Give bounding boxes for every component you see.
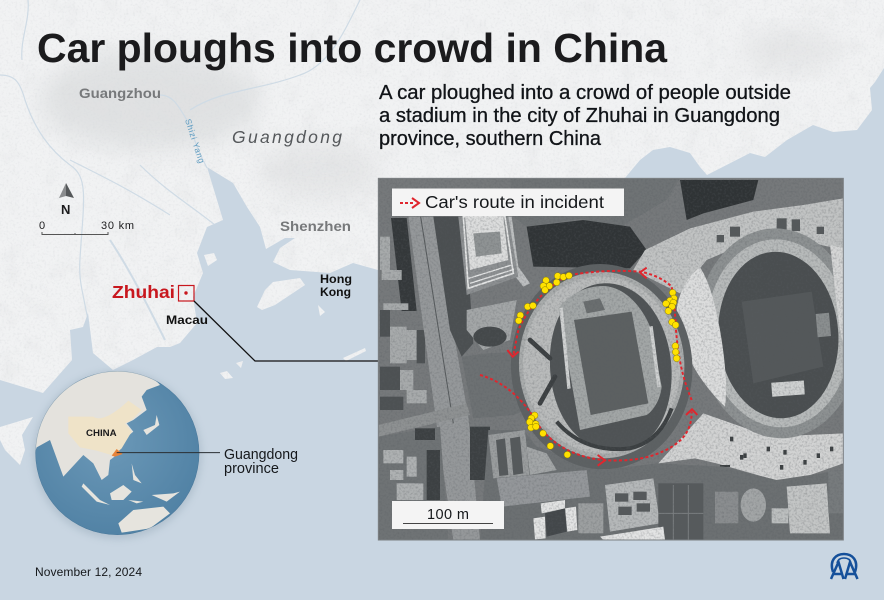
tennis courts (658, 483, 703, 540)
map label: Hong Kong: Kong (320, 287, 351, 299)
left stadium pitch (574, 312, 648, 415)
tree strip along road (391, 218, 417, 311)
scale bar: 30 km (39, 220, 134, 234)
map label: Guangzhou: Guangzhou (79, 85, 161, 101)
dark verge (433, 217, 473, 357)
scale bar: 30 km: 30 km (101, 220, 134, 232)
bottom-left city (437, 426, 444, 470)
left stadium ring road (511, 264, 692, 470)
right stadium white roofs (677, 267, 726, 407)
china (68, 401, 142, 456)
bottom block area (480, 430, 843, 540)
locator globe (33, 369, 220, 539)
map label: Macau: Macau (166, 315, 208, 327)
icon: north arrow: N (61, 202, 70, 217)
building with courtyards (605, 478, 660, 532)
callout: Guangdong province (224, 447, 298, 477)
pale driveway (505, 217, 530, 287)
intro text (379, 82, 791, 150)
trees around stadium (530, 340, 555, 403)
intro text: province, southern China (379, 128, 602, 150)
map label: Shizi Yang river: Shizi Yang (183, 118, 207, 165)
city patches left (380, 237, 427, 403)
tree belt (680, 180, 758, 220)
scale bar: 30 km: 0 (39, 220, 45, 232)
guangdong highlight (112, 449, 123, 457)
main road (408, 217, 480, 540)
leader line to satellite image (194, 301, 379, 361)
cross road (378, 403, 470, 437)
callout: Guangdong province: province (224, 461, 279, 477)
bottom plaza (658, 413, 843, 483)
intro text: a stadium in the city of Zhuhai in Guangdong (379, 105, 780, 127)
map label: Guangdong region: Guangdong (232, 127, 342, 147)
parking courtyard (467, 300, 517, 350)
grass plaza west of stadium (462, 352, 520, 418)
incident markers: yellow dots (515, 272, 680, 458)
label: CHINA: CHINA (86, 428, 117, 438)
title: Car ploughs into crowd in China (37, 25, 668, 71)
tall building (458, 217, 518, 295)
callout: Guangdong province: Guangdong (224, 447, 298, 463)
right stadium track (718, 252, 838, 418)
asia landmass (33, 369, 160, 480)
right stadium pitch (742, 292, 823, 383)
left stadium outer track (550, 283, 672, 451)
icon: north arrow (59, 183, 74, 217)
gardens (488, 430, 529, 478)
photo scale bar: 100 m (392, 501, 504, 529)
map label: Hong Kong: Hong (320, 274, 352, 286)
left stadium stands (558, 286, 662, 430)
top-right plaza (633, 198, 843, 293)
background map: land (0, 0, 884, 480)
locator square: Zhuhai (178, 286, 194, 301)
legend: car's route (392, 188, 624, 216)
pale blocks (787, 483, 830, 533)
date: November 12, 2024 (35, 565, 142, 579)
satellite image panel (378, 178, 867, 540)
intro text: A car ploughed into a crowd of people outside (379, 82, 791, 104)
map label: Shenzhen: Shenzhen (280, 218, 351, 234)
islands (82, 415, 180, 533)
dark tree block (527, 220, 647, 268)
photo scale bar: 100 m: 100 m (427, 507, 469, 523)
map label: Zhuhai: Zhuhai (112, 282, 175, 302)
top area (510, 178, 680, 237)
map label: Hong Kong (320, 274, 352, 299)
small pitches (715, 492, 738, 523)
route: red dashed arrows (480, 268, 697, 466)
right stadium stands (706, 228, 843, 438)
legend: car's route: Car's route in incident (425, 192, 604, 212)
icon: Anadolu Agency logo (831, 554, 858, 579)
